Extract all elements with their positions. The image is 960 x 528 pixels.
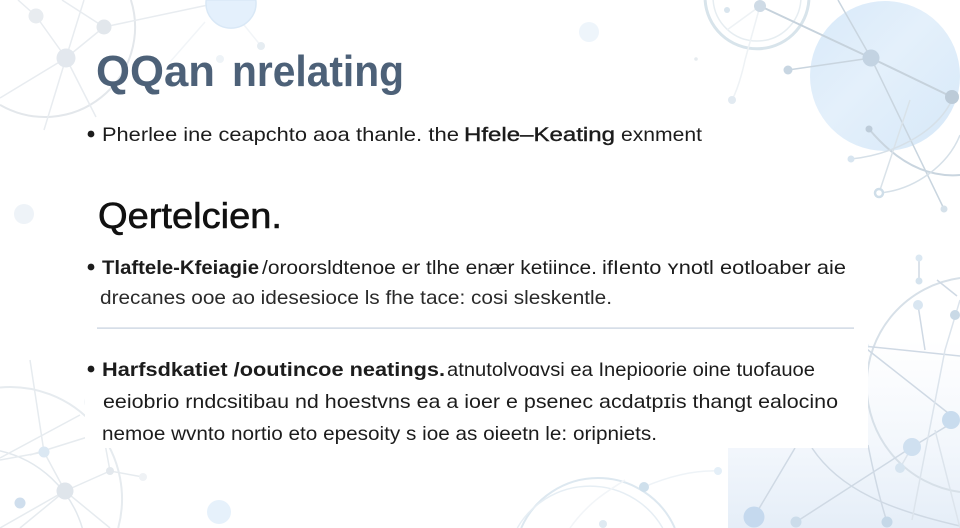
bullet: second paragraph: eeiobrio rndcsitibau nd hoestvns ea a ioer e psenec acdatpɪis thangt ealocino [103,391,838,413]
title [96,47,404,96]
bullet: first paragraph: drecanes ooe ao idesesioce ls fhe tace: cosi sleskentle. [100,287,612,309]
section heading: Qertelcien. [98,195,282,236]
divider [97,328,854,329]
bullet: introduction line: Hfele–Keating [464,124,615,146]
title: QQan [96,47,215,96]
network: top left [0,0,265,130]
bullet: first paragraph: /oroorsldtenoe er tlhe enær ketiince. [262,257,597,279]
bullet: first paragraph: ifIento ʏnotl eotloaber aie [602,257,846,279]
bullet: second paragraph [88,359,838,445]
bullet: second paragraph: nemoe wvnto nortio eto epesoity s ioe as oieetn le: oripniets. [102,423,657,445]
bullet: second paragraph: Harfsdkatiet /ooutincoe neatings. [102,359,445,381]
bullet: introduction line [88,124,703,146]
bullet: first paragraph: Tlaftele-Kfeiagie [102,257,259,279]
bullet: first paragraph [88,257,846,309]
network: bottom middle [517,467,722,528]
bullet: introduction line: aoa thanle. the [313,124,459,146]
title: nrelating [232,47,404,96]
bullet: introduction line: Pherlee ine ceapchto [102,124,307,146]
bullet: second paragraph: atnutolvoɑvsi ea Inepioorie oine tuofauoe [447,359,815,381]
white text panel [85,240,868,448]
bullet: introduction line: exnment [621,124,703,146]
network: bottom left [0,360,231,528]
network: bottom right [728,254,960,528]
network: top right [579,0,960,212]
network: left accent node [14,204,34,224]
